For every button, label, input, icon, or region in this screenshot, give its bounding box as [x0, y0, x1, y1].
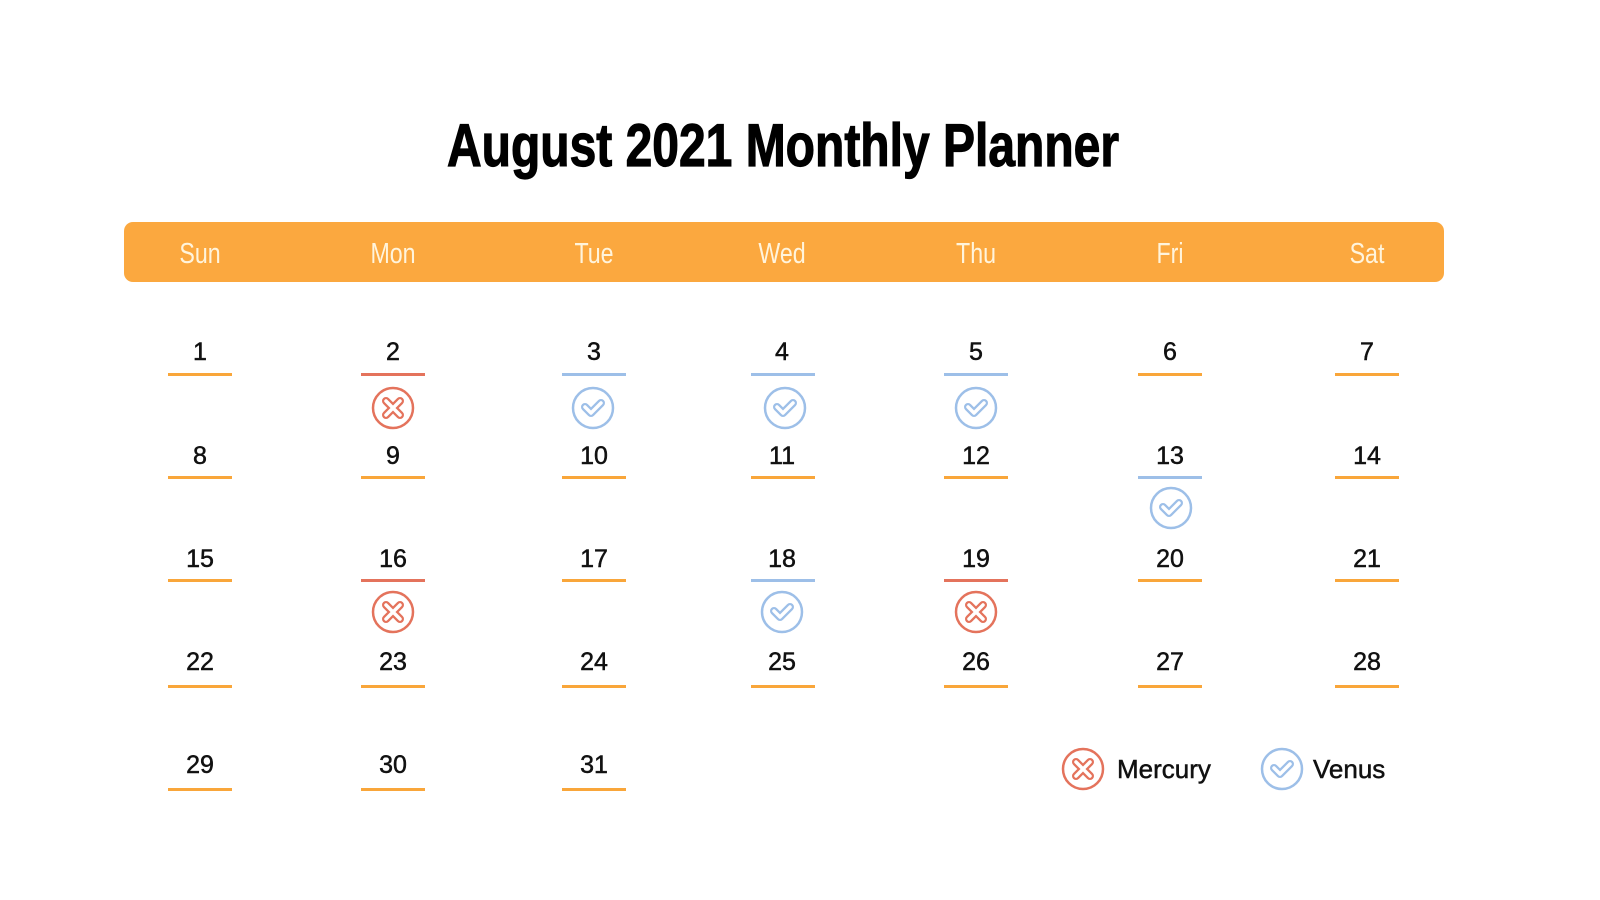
header bar: weekdays: Thu [956, 236, 996, 270]
row 3: 21 [1353, 545, 1381, 573]
icons row 2 [1151, 488, 1191, 528]
row 2: 8 [193, 442, 207, 470]
row 1 [168, 338, 1399, 376]
header bar: weekdays: Fri [1156, 236, 1184, 270]
legend: Venus [1262, 749, 1385, 789]
calendar grid [168, 338, 1399, 791]
row 2: 14 [1353, 442, 1381, 470]
row 3 [168, 545, 1399, 582]
row 5 [168, 751, 626, 791]
row 5: 30 [379, 751, 407, 779]
legend [1063, 749, 1385, 789]
row 4 [168, 648, 1399, 688]
row 1: 5 [969, 338, 983, 366]
row 4: 23 [379, 648, 407, 676]
row 1: 6 [1163, 338, 1177, 366]
row 2: 9 [386, 442, 400, 470]
row 4: 22 [186, 648, 214, 676]
legend: Mercury: Mercury [1117, 754, 1211, 784]
row 3: 18 [768, 545, 796, 573]
row 4: 24 [580, 648, 608, 676]
row 3: 20 [1156, 545, 1184, 573]
legend: Mercury [1063, 749, 1211, 789]
header bar: weekdays: Tue [574, 236, 614, 270]
row 3: 17 [580, 545, 608, 573]
row 3: 16 [379, 545, 407, 573]
header bar: weekdays: Wed [758, 236, 806, 270]
header bar: weekdays [124, 222, 1444, 282]
row 3: 15 [186, 545, 214, 573]
row 2: 10 [580, 442, 608, 470]
row 1: 2 [386, 338, 400, 366]
row 5: 31 [580, 751, 608, 779]
row 2: 13 [1156, 442, 1184, 470]
row 1: 3 [587, 338, 601, 366]
row 1: 7 [1360, 338, 1374, 366]
row 4: 27 [1156, 648, 1184, 676]
icons row 3 [373, 592, 996, 632]
header bar: weekdays: Sat [1350, 236, 1385, 270]
header bar: weekdays: Mon [370, 236, 416, 270]
title: August 2021 Monthly Planner [447, 112, 1119, 179]
row 2 [168, 442, 1399, 479]
row 3: 19 [962, 545, 990, 573]
row 4: 28 [1353, 648, 1381, 676]
row 5: 29 [186, 751, 214, 779]
legend: Venus: Venus [1313, 754, 1385, 784]
row 4: 26 [962, 648, 990, 676]
row 2: 11 [769, 442, 795, 470]
row 1: 4 [775, 338, 789, 366]
header bar: weekdays: Sun [179, 236, 221, 270]
row 2: 12 [962, 442, 990, 470]
icons row 1 [373, 388, 996, 428]
row 4: 25 [768, 648, 796, 676]
row 1: 1 [193, 338, 207, 366]
